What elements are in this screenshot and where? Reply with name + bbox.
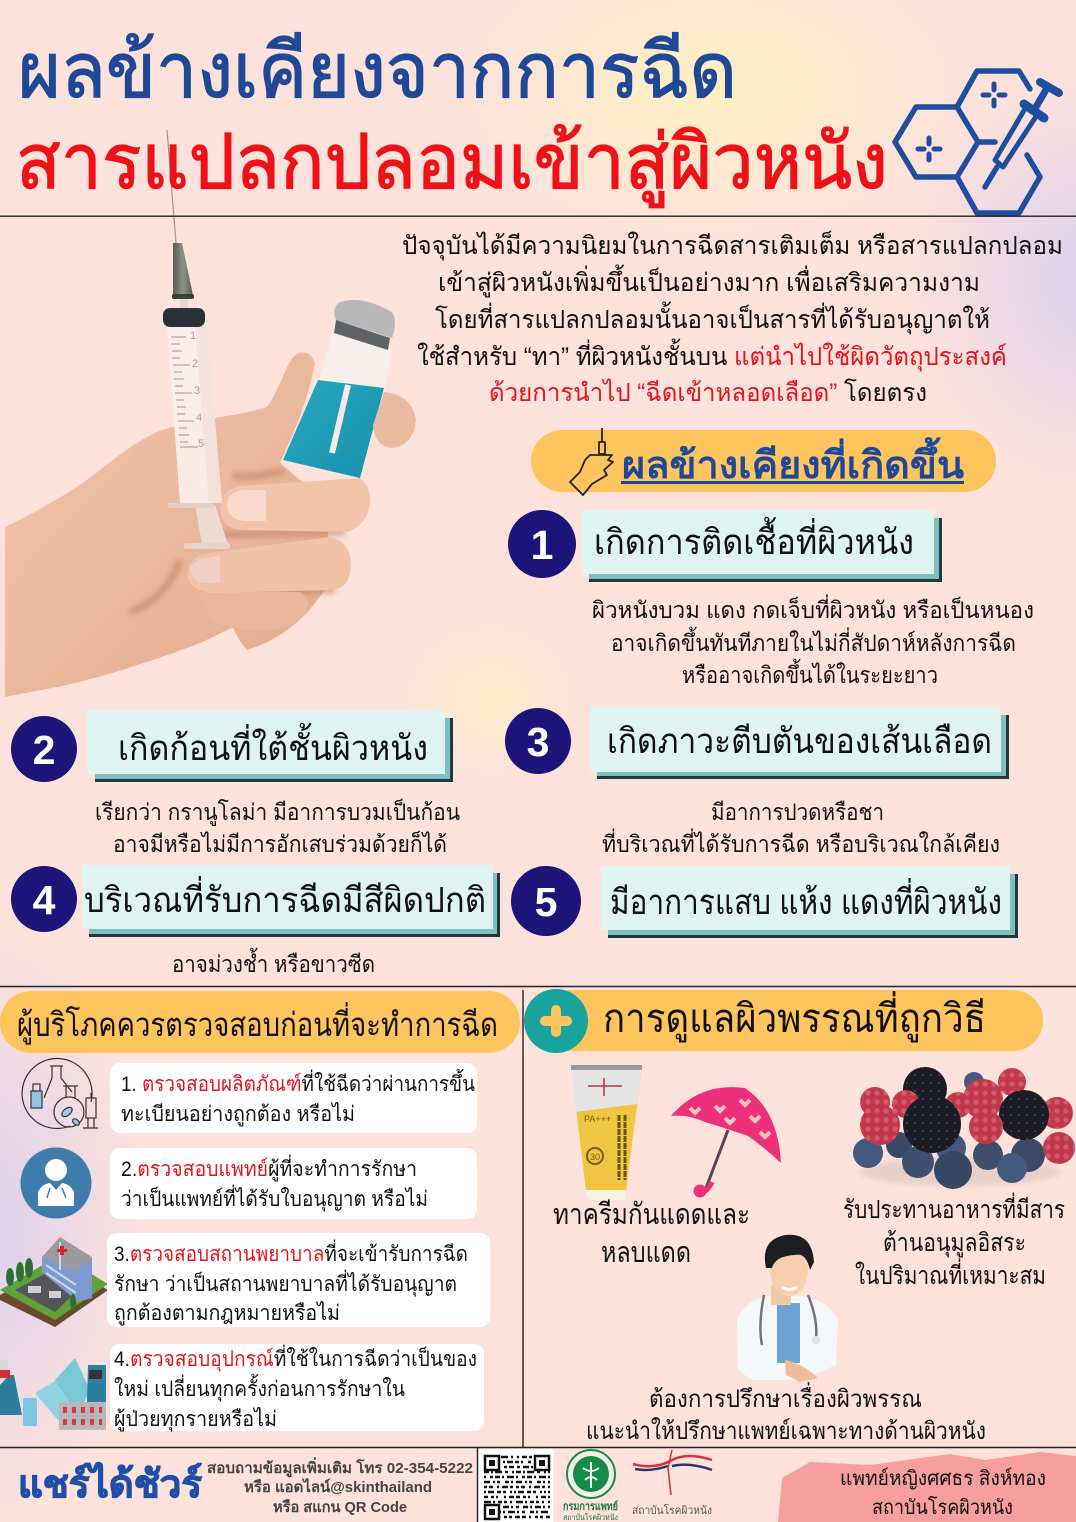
footer: contact text: หรือ สแกน QR Code: [273, 1499, 407, 1516]
check card 4: [110, 1344, 484, 1432]
side effect 5: 5: [535, 879, 557, 925]
check card 1: [110, 1063, 477, 1133]
footer: QR code: [478, 1449, 554, 1522]
check card 3: ถูกต้องตามกฎหมายหรือไม่: [114, 1301, 340, 1326]
side effect 2 description: [95, 797, 460, 857]
icon: hexagons and syringe: [895, 71, 1059, 213]
icon: hand with syringe: [570, 428, 613, 495]
side effect 3: [505, 707, 1009, 779]
icon: flasks and syringe: [22, 1058, 98, 1128]
side effect 1 description: หรืออาจเกิดขึ้นได้ในระยะยาว: [682, 659, 938, 688]
check card 1: 1. ตรวจสอบผลิตภัณฑ์ที่ใช้ฉีดว่าผ่านการขึ้น: [121, 1069, 475, 1096]
check card 1: ทะเบียนอย่างถูกต้อง หรือไม่: [121, 1102, 355, 1127]
side effect 4: 4: [33, 877, 56, 923]
side effect 2 description: เรียกว่า กรานูโลม่า มีอาการบวมเป็นก้อน: [95, 797, 460, 826]
side effect 4 description: อาจม่วงช้ำ หรือขาวซีด: [172, 948, 375, 977]
intro paragraph: ด้วยการนำไป “ฉีดเข้าหลอดเลือด” โดยตรง: [489, 378, 927, 407]
icon: hospital building: [0, 1237, 108, 1327]
needle: [167, 130, 176, 243]
syringe: 1: [190, 330, 196, 342]
footer: author on pink brush panel: สถาบันโรคผิวหนัง: [872, 1496, 1013, 1519]
icon: medical supplies: [0, 1358, 106, 1430]
intro paragraph: ปัจจุบันได้มีความนิยมในการฉีดสารเติมเต็ม หรือสารแปลกปลอม: [402, 230, 1063, 261]
photo: sunscreen tube: PA+++: [584, 1114, 611, 1124]
text: sunscreen: [553, 1199, 750, 1269]
photo: mixed berries: [853, 1067, 1075, 1189]
check card 4: ผู้ป่วยทุกรายหรือไม่: [114, 1407, 277, 1432]
check card 3: 3.ตรวจสอบสถานพยาบาลที่จะเข้ารับการฉีด: [114, 1239, 468, 1266]
shadows between fingers: [130, 470, 345, 612]
heading pill: side effects: ผลข้างเคียงที่เกิดขึ้น: [622, 437, 964, 487]
finger 3: [200, 592, 308, 630]
check card 2: ว่าเป็นแพทย์ที่ได้รับใบอนุญาต หรือไม่: [121, 1184, 428, 1212]
side effect 1 description: อาจเกิดขึ้นทันทีภายในไม่กี่สัปดาห์หลังการฉีด: [611, 627, 1016, 656]
heading pill: skin care: [524, 989, 1043, 1053]
heading pill: consumer checks: ผู้บริโภคควรตรวจสอบก่อนที่จะทำการฉีด: [17, 1002, 498, 1045]
side effect 3 description: ที่บริเวณที่ได้รับการฉีด หรือบริเวณใกล้เคียง: [602, 828, 1000, 857]
photo: sunscreen tube: 30: [590, 1152, 600, 1162]
footer: brand logotype: แชร์ได้ชัวร์: [18, 1462, 203, 1506]
text: see a dermatologist: แนะนำให้ปรึกษาแพทย์เฉพาะทางด้านผิวหนัง: [586, 1417, 986, 1445]
heading pill: consumer checks: [0, 991, 520, 1053]
side effect 2: [11, 710, 453, 782]
side effect 3: เกิดภาวะตีบตันของเส้นเลือด: [607, 722, 992, 761]
syringe: [163, 243, 230, 549]
side effect 2: เกิดก้อนที่ใต้ชั้นผิวหนัง: [118, 722, 428, 768]
vial: [283, 300, 395, 478]
text: antioxidants: [843, 1192, 1065, 1290]
side effect 1: [508, 510, 942, 582]
footer: author on pink brush panel: แพทย์หญิงศศธร สิงห์ทอง: [840, 1467, 1046, 1490]
intro paragraph: ใช้สำหรับ “ทา” ที่ผิวหนังชั้นบน แต่นำไปใช้ผิดวัตถุประสงค์: [417, 338, 1007, 372]
side effect 5: [511, 866, 1018, 938]
syringe: 3: [194, 385, 200, 397]
divider under title: [0, 216, 1076, 217]
icon: doctor badge: [20, 1148, 92, 1218]
photo: hand holding syringe and vial: [5, 130, 416, 697]
footer: contact text: สอบถามข้อมูลเพิ่มเติม โทร 02-354-5222: [207, 1457, 473, 1478]
side effect 5: มีอาการแสบ แห้ง แดงที่ผิวหนัง: [610, 878, 1002, 922]
check card 4: ใหม่ เปลี่ยนทุกครั้งก่อนการรักษาใน: [114, 1374, 405, 1402]
check card 3: [107, 1233, 490, 1327]
side effect 2 description: อาจมีหรือไม่มีการอักเสบร่วมด้วยก็ได้: [113, 829, 447, 857]
illustration: doctor: [721, 1235, 936, 1382]
footer: department of medical services logo: กรมการแพทย์: [563, 1500, 618, 1513]
side effect 1 description: [592, 594, 1034, 688]
side effect 3 description: [602, 799, 1000, 857]
footer: contact text: [207, 1457, 473, 1516]
check card 2: [110, 1148, 477, 1219]
syringe: 2: [192, 358, 198, 370]
finger 2: [187, 537, 351, 593]
side effect 4: บริเวณที่รับการฉีดมีสีผิดปกติ: [84, 876, 486, 920]
title: ผลข้างเคียงจากการฉีด: [18, 29, 737, 114]
footer: department of medical services logo: สถาบันโรคผิวหนัง: [563, 1512, 618, 1522]
text: antioxidants: ต้านอนุมูลอิสระ: [883, 1229, 1026, 1258]
side effect 3: 3: [527, 719, 549, 765]
pinky fingertip behind vial: [373, 392, 416, 448]
check card 3: รักษา ว่าเป็นสถานพยาบาลที่ได้รับอนุญาต: [114, 1269, 457, 1297]
title: สารแปลกปลอมเข้าสู่ผิวหนัง: [16, 120, 888, 208]
section dividers: [0, 986, 1076, 1522]
side effect 1: 1: [531, 522, 553, 568]
heading pill: skin care: การดูแลผิวพรรณที่ถูกวิธี: [603, 991, 986, 1042]
side effect 2: 2: [33, 727, 55, 773]
text: see a dermatologist: ต้องการปรึกษาเรื่องผิวพรรณ: [649, 1382, 922, 1413]
syringe: 5: [198, 438, 204, 450]
footer: author on pink brush panel: [778, 1452, 1076, 1522]
finger 1: [220, 478, 370, 532]
footer: contact text: หรือ แอดไลน์@skinthailand: [244, 1477, 432, 1496]
check card 2: 2.ตรวจสอบแพทย์ผู้ที่จะทำการรักษา: [121, 1154, 417, 1182]
text: see a dermatologist: [586, 1382, 986, 1445]
text: sunscreen: ทาครีมกันแดดและ: [553, 1199, 750, 1231]
icon: pink umbrella: [671, 1087, 781, 1198]
check card 4: 4.ตรวจสอบอุปกรณ์ที่ใช้ในการฉีดว่าเป็นของ: [114, 1344, 477, 1372]
text: sunscreen: หลบแดด: [601, 1237, 691, 1269]
side effect 4: [11, 865, 500, 937]
syringe: 4: [196, 412, 202, 424]
side effect 3 description: มีอาการปวดหรือชา: [711, 799, 884, 825]
footer: department of medical services logo: [563, 1450, 618, 1522]
intro paragraph: [402, 230, 1063, 407]
side effect 1 description: ผิวหนังบวม แดง กดเจ็บที่ผิวหนัง หรือเป็นหนอง: [592, 594, 1034, 623]
palm and thumb: [5, 352, 330, 697]
icon: teal plus circle: [524, 989, 588, 1053]
footer: institute of dermatology logo: [632, 1450, 712, 1517]
footer: institute of dermatology logo: สถาบันโรคผิวหนัง: [632, 1503, 712, 1517]
side effect 1: เกิดการติดเชื้อที่ผิวหนัง: [594, 516, 914, 562]
heading pill: side effects: [531, 428, 996, 495]
title: [16, 29, 888, 208]
photo: sunscreen tube: [571, 1065, 642, 1202]
intro paragraph: โดยที่สารแปลกปลอมนั้นอาจเป็นสารที่ได้รับอนุญาตให้: [435, 301, 990, 335]
intro paragraph: เข้าสู่ผิวหนังเพิ่มขึ้นเป็นอย่างมาก เพื่อเสริมความงาม: [438, 264, 980, 298]
